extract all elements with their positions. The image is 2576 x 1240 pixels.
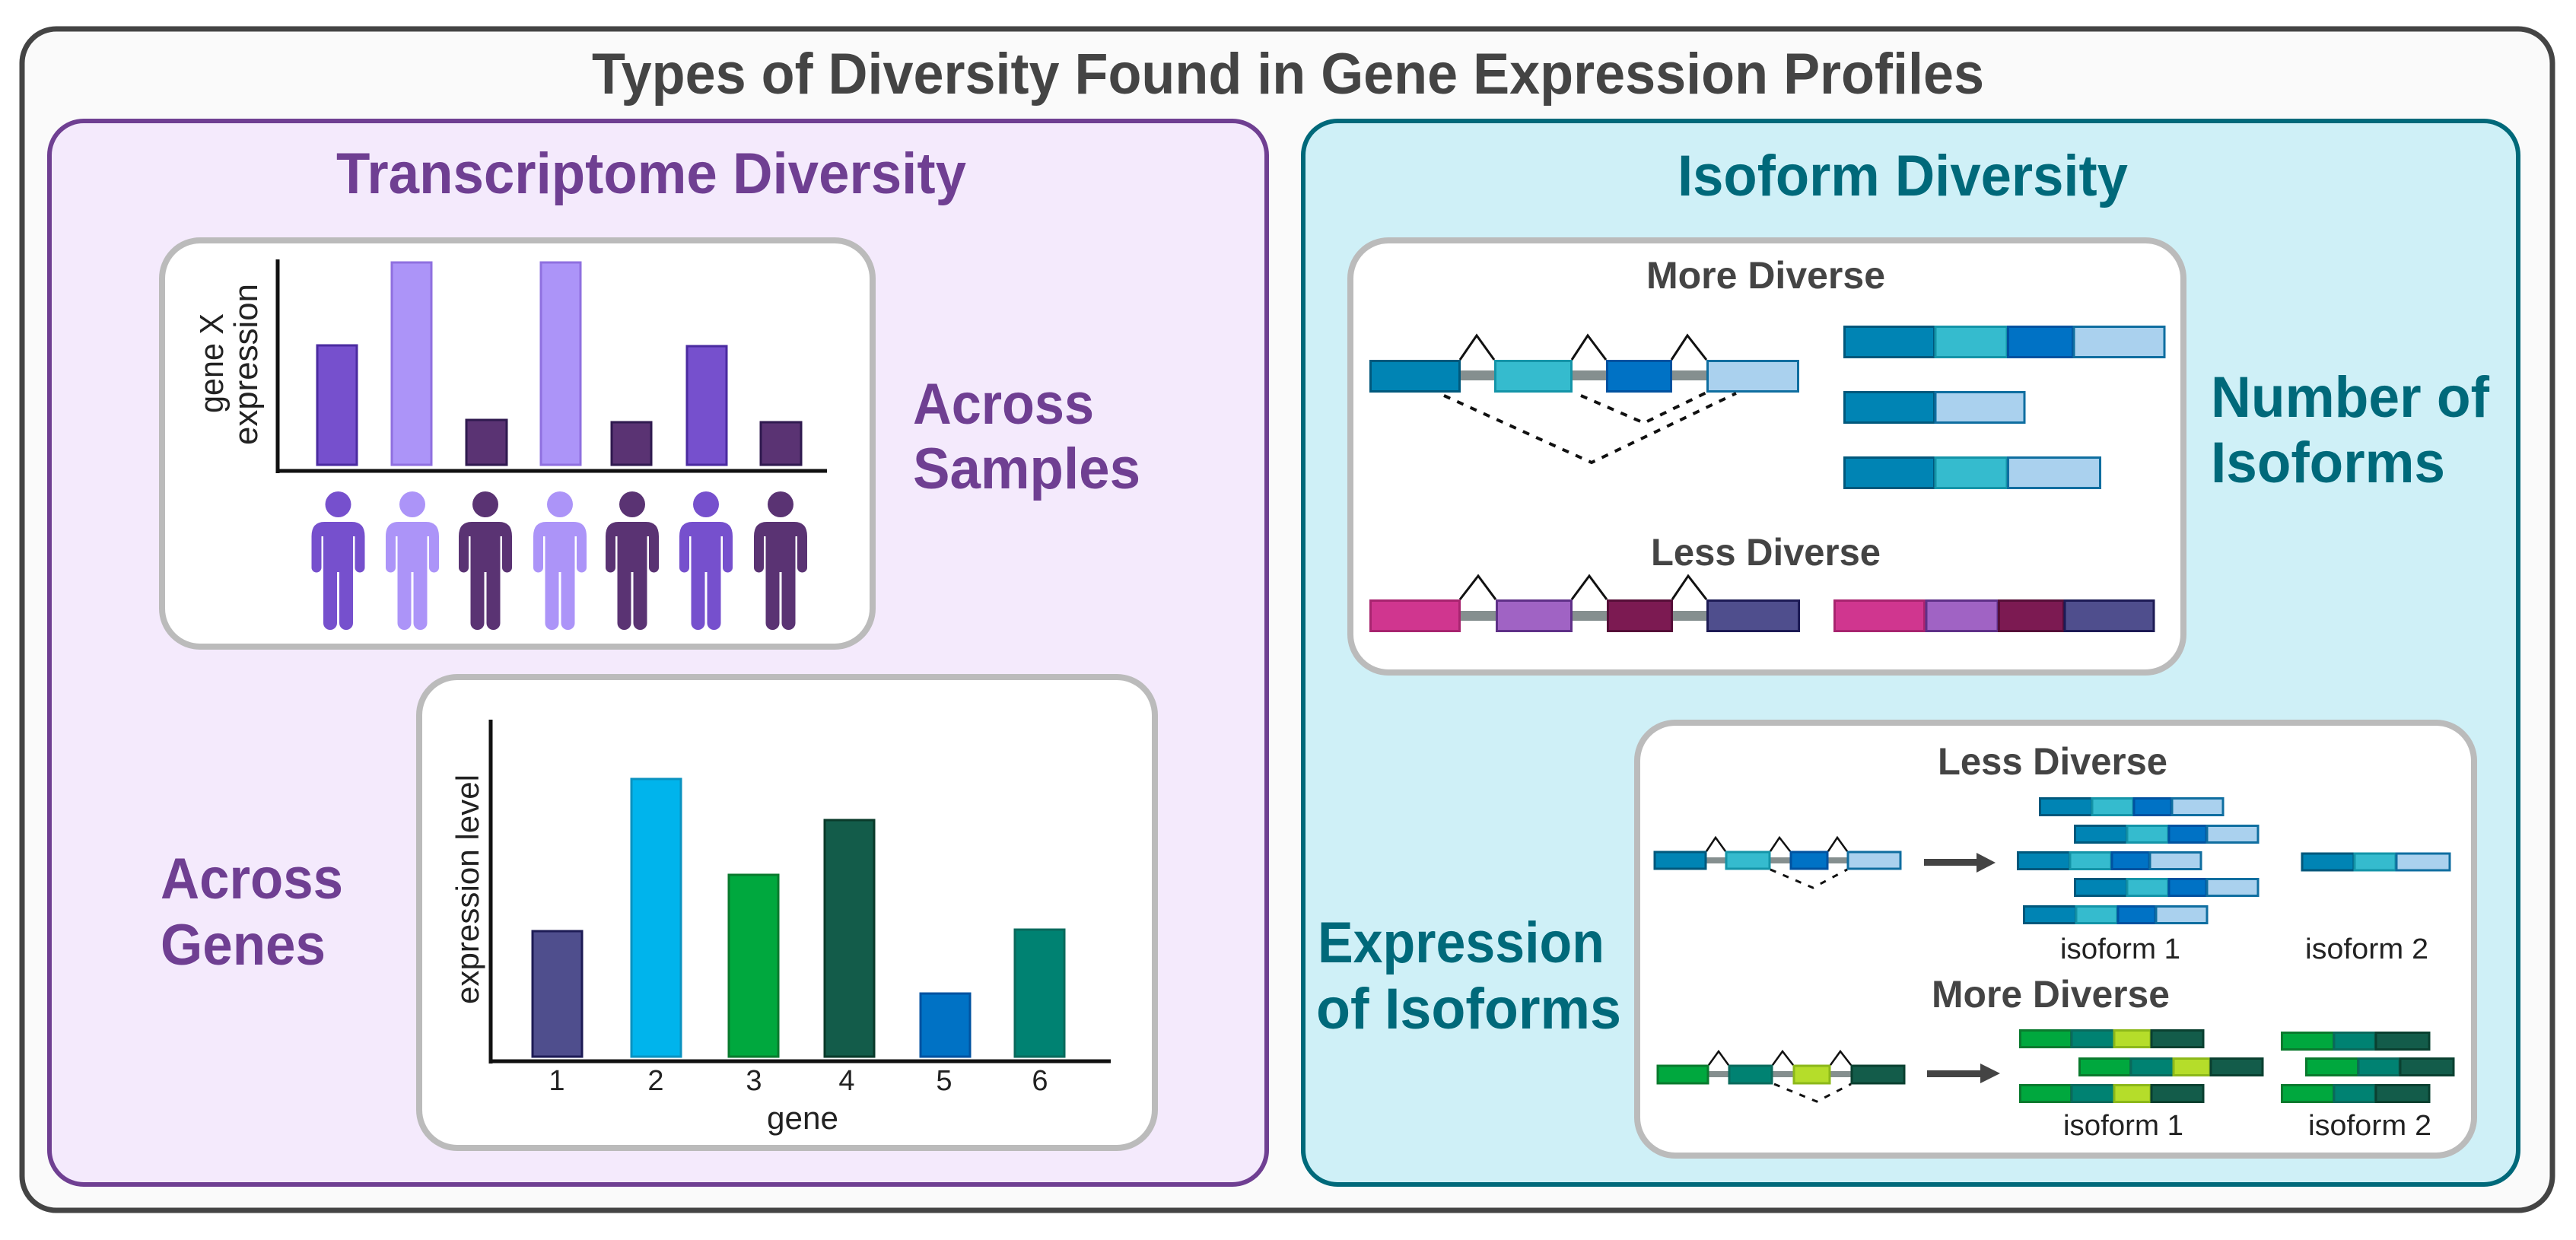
label: across samples: Across bbox=[913, 372, 1094, 437]
label: isoform 1: isoform 1 bbox=[2063, 1110, 2183, 1142]
isoform 2: less diverse bbox=[2302, 854, 2450, 870]
heading: isoform diversity: Isoform Diversity bbox=[1678, 144, 2128, 208]
label: across samples: Samples bbox=[913, 437, 1140, 501]
label: isoform 2: isoform 2 bbox=[2305, 933, 2428, 965]
x axis label: gene: gene bbox=[767, 1100, 838, 1136]
subheading: more diverse: More Diverse bbox=[1646, 254, 1885, 297]
label: across genes: Genes bbox=[161, 913, 326, 978]
label: expression of isoforms: of Isoforms bbox=[1316, 977, 1621, 1041]
card: across samples chart bbox=[162, 240, 873, 647]
axis tick labels: 3 bbox=[746, 1065, 762, 1097]
title: Types of Diversity Found in Gene Expression Profiles bbox=[592, 42, 1984, 107]
isoforms: more diverse bbox=[1844, 327, 2164, 488]
label: number of isoforms: Number of bbox=[2211, 365, 2490, 430]
y axis label: gene X expression bbox=[193, 284, 265, 445]
isoform 1 stack: more diverse bbox=[2021, 1030, 2263, 1102]
arrow bbox=[1927, 1064, 2000, 1083]
label: across genes: Across bbox=[161, 847, 343, 911]
gene model: less diverse expression bbox=[1655, 838, 1900, 888]
panel: isoform diversity bbox=[1303, 121, 2518, 1184]
axis tick labels: 4 bbox=[838, 1065, 855, 1097]
gene model: more diverse bbox=[1371, 335, 1798, 463]
heading: transcriptome diversity: Transcriptome Diversity bbox=[336, 141, 966, 206]
card: expression of isoforms bbox=[1637, 723, 2474, 1156]
isoform: less diverse bbox=[1835, 601, 2154, 631]
gene model: less diverse bbox=[1371, 576, 1798, 631]
bar chart: gene X by sample bbox=[317, 262, 801, 465]
panel: transcriptome diversity bbox=[49, 121, 1267, 1184]
gene model: more diverse expression bbox=[1658, 1051, 1904, 1102]
label: isoform 2: isoform 2 bbox=[2308, 1110, 2431, 1142]
axis tick labels: 5 bbox=[936, 1065, 952, 1097]
card: number of isoforms bbox=[1350, 240, 2183, 672]
y axis label: gene X expression: expression bbox=[227, 284, 265, 445]
label: across samples bbox=[913, 372, 1140, 501]
label: number of isoforms: Isoforms bbox=[2211, 431, 2445, 495]
subheading: less diverse: Less Diverse bbox=[1651, 531, 1881, 574]
subheading: less diverse: Less Diverse bbox=[1938, 740, 2167, 783]
axis tick labels: 6 bbox=[1032, 1065, 1048, 1097]
label: number of isoforms bbox=[2211, 365, 2490, 495]
label: isoform 1: isoform 1 bbox=[2060, 933, 2180, 965]
y axis label: gene X expression: gene X bbox=[193, 313, 231, 413]
icons: seven people bbox=[312, 491, 807, 630]
card: across genes chart bbox=[419, 677, 1155, 1148]
chart axes bbox=[491, 720, 1111, 1064]
label: expression of isoforms: Expression bbox=[1318, 911, 1604, 975]
isoform 1 stack: less diverse bbox=[2018, 799, 2258, 924]
label: across genes bbox=[161, 847, 343, 978]
arrow bbox=[1924, 853, 1996, 873]
subheading: more diverse: More Diverse bbox=[1932, 973, 2170, 1016]
bar chart: expression by gene bbox=[533, 779, 1064, 1057]
axis tick labels: 1 bbox=[549, 1065, 565, 1097]
axis tick labels bbox=[549, 1065, 1048, 1097]
axis tick labels: 2 bbox=[647, 1065, 664, 1097]
label: expression of isoforms bbox=[1316, 911, 1621, 1041]
chart axes bbox=[278, 259, 827, 473]
isoform 2 stack: more diverse bbox=[2282, 1033, 2454, 1102]
y axis label: expression level: expression level bbox=[450, 774, 485, 1004]
